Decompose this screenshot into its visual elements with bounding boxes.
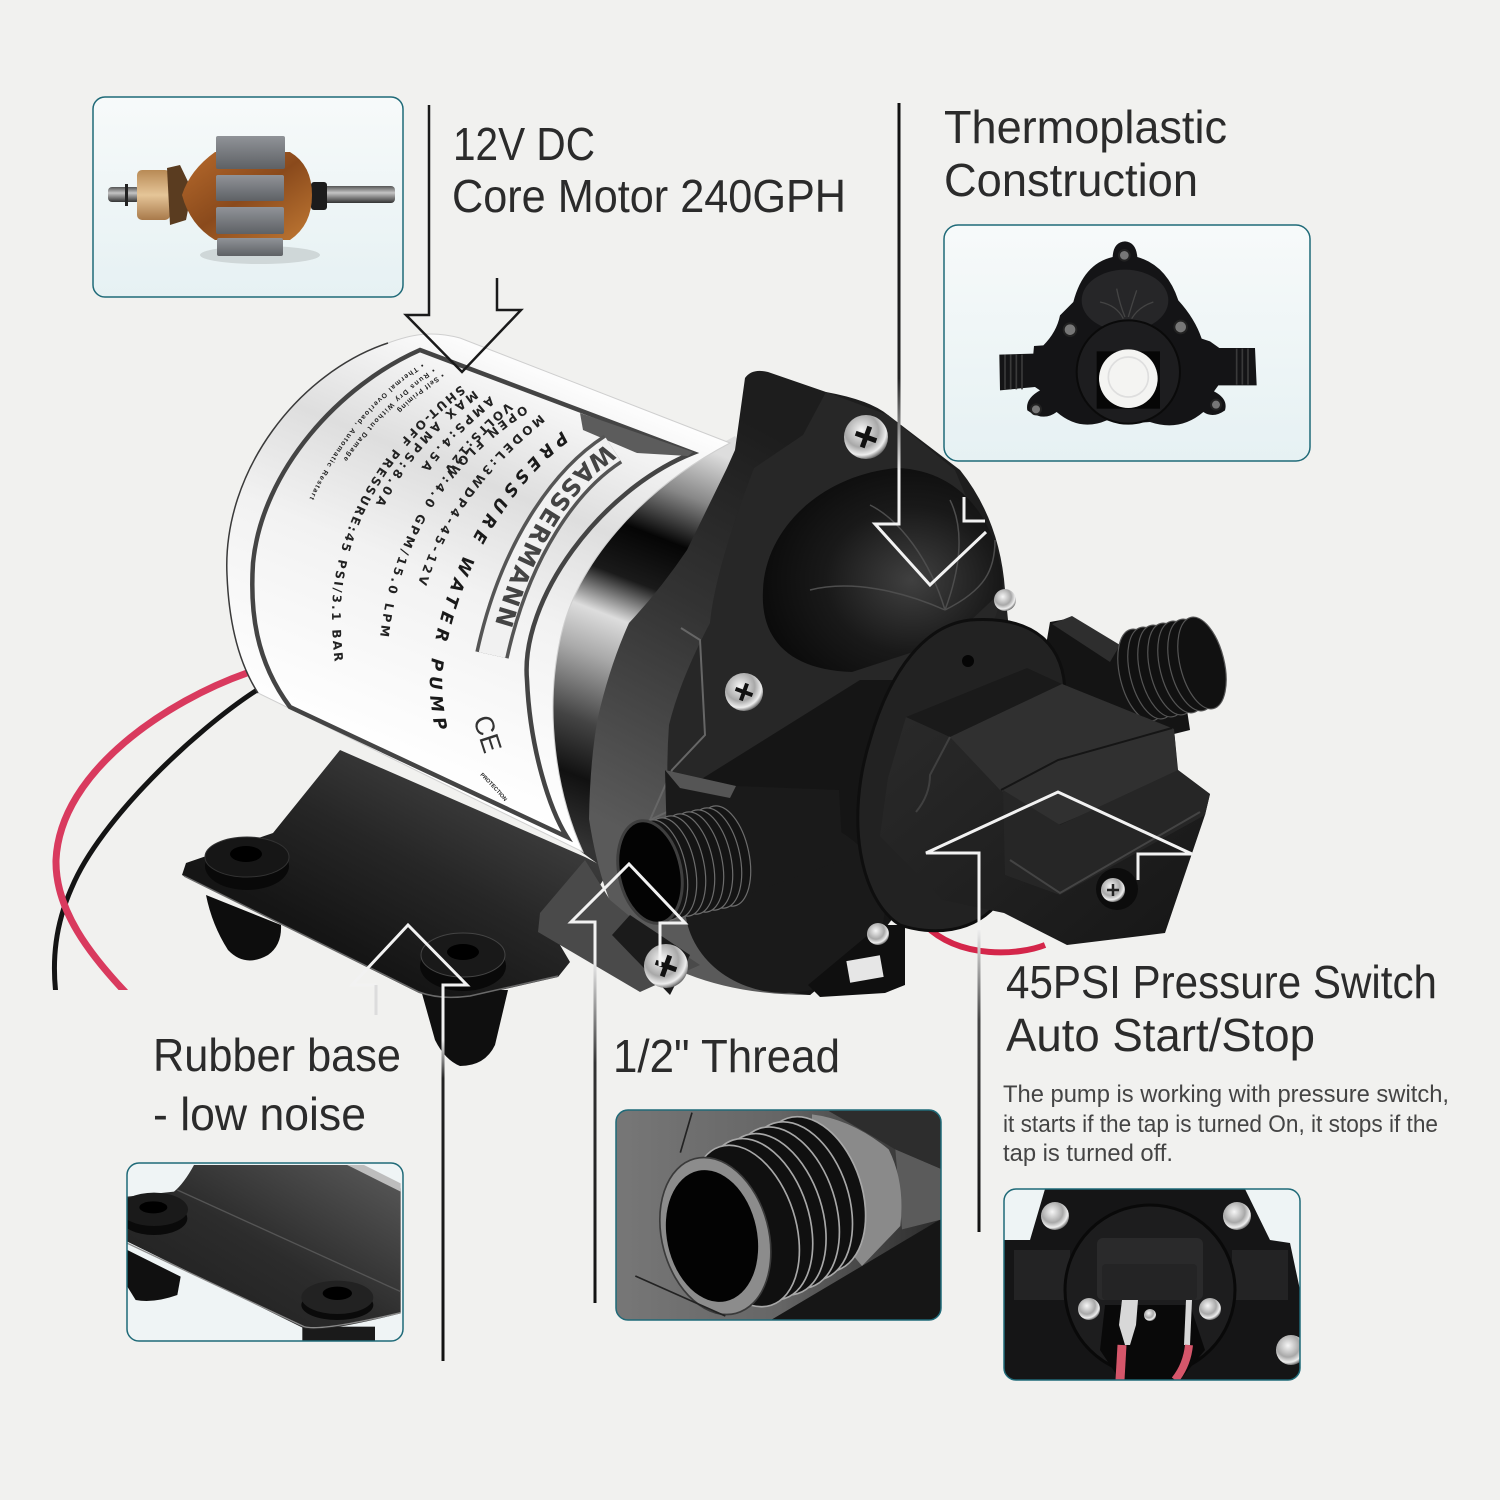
heading: rubber base: Rubber base <box>153 1029 401 1081</box>
switch cover <box>1097 1238 1203 1300</box>
flange step highlight <box>650 628 705 820</box>
copper windings <box>182 152 312 240</box>
pressure switch description <box>1003 1081 1449 1167</box>
screws top right <box>1223 1202 1251 1230</box>
pump head <box>1004 1189 1300 1380</box>
heading: motor: Core Motor 240GPH <box>452 170 846 222</box>
outlet port <box>1040 612 1235 745</box>
cover step <box>1102 1264 1197 1300</box>
tab front barrel <box>612 915 690 995</box>
grommet left <box>128 1214 188 1235</box>
switch disc <box>1065 1205 1235 1375</box>
inlet port <box>609 770 843 929</box>
power wires <box>54 673 257 995</box>
heading: thread: 1/2" Thread <box>613 1030 840 1082</box>
heading: rubber base: - low noise <box>153 1088 366 1140</box>
arrow: thermoplastic callout <box>875 103 986 585</box>
heading: motor: 12V DC <box>453 118 595 170</box>
plate <box>127 1165 401 1329</box>
volts: VOLTS:12V <box>446 404 514 474</box>
product name: PRESSURE WATER PUMP <box>430 431 568 729</box>
front foot <box>421 990 508 1066</box>
right terminal <box>1184 1300 1192 1345</box>
thermal protection mark: PROTECTION <box>480 772 508 802</box>
heading: rubber base <box>153 1029 401 1140</box>
lug holes <box>1031 250 1221 414</box>
disc pin hole <box>962 655 974 667</box>
head housing <box>999 241 1257 425</box>
feature line one: • Self Priming <box>397 374 444 412</box>
plate <box>182 750 610 998</box>
CE mark: CE <box>467 712 507 757</box>
screw mid <box>725 673 763 711</box>
model: MODEL:3WDP4-45-12V <box>419 414 545 586</box>
screw lower small <box>867 923 889 945</box>
rear flange <box>589 371 1010 995</box>
top strip <box>347 1165 401 1192</box>
red switch wire <box>925 925 1045 952</box>
panel: switch terminals <box>1004 1189 1306 1380</box>
white diaphragm <box>1099 349 1158 408</box>
can back edge <box>227 343 388 693</box>
panel: rubber base <box>120 1163 403 1343</box>
pressure switch description: it starts if the tap is turned On, it stops if the <box>1003 1111 1438 1138</box>
right collar <box>311 182 327 210</box>
open flow: OPEN FLOW:4.0 GPM/15.0 LPM <box>380 406 527 636</box>
inlet opening <box>609 815 691 929</box>
product label border <box>252 350 693 837</box>
housing seam <box>635 1113 725 1316</box>
amps: AMPS:4.5A <box>421 396 493 470</box>
arrow: rubber base callout <box>352 925 467 1361</box>
label text <box>310 364 622 802</box>
heading: pressure switch: Auto Start/Stop <box>1006 1009 1315 1061</box>
top right shade <box>829 1111 942 1169</box>
inlet thread ridges <box>626 801 759 925</box>
screw mid left <box>1078 1298 1100 1320</box>
port collar <box>812 1114 901 1266</box>
rear foot <box>127 1250 181 1301</box>
bracket window <box>846 955 884 983</box>
pipe body <box>895 1149 942 1229</box>
red wire right <box>1175 1345 1189 1380</box>
fold highlight <box>177 1190 401 1292</box>
panel: motor rotor <box>93 97 403 297</box>
brand logo band <box>492 449 613 655</box>
rotor shadow <box>200 246 320 264</box>
left shaft <box>108 187 140 202</box>
arrow: motor callout <box>406 105 521 372</box>
cover screw <box>1096 868 1138 910</box>
centre ring <box>1077 320 1180 424</box>
dome ribs <box>810 500 995 610</box>
port opening <box>666 1170 758 1302</box>
screw lower right <box>1276 1335 1306 1365</box>
centre square <box>1097 351 1160 409</box>
heading: pressure switch <box>1006 956 1437 1061</box>
panel: thermoplastic head <box>944 225 1310 461</box>
shut-off pressure: SHUT-OFF PRESSURE:45 PSI/3.1 BAR <box>332 386 465 662</box>
motor can <box>227 334 730 852</box>
mounting base plate <box>182 750 610 1066</box>
dome head <box>763 468 1003 672</box>
diaphragm ring <box>1108 357 1148 397</box>
lower dome <box>685 817 885 993</box>
plate edge <box>127 1243 401 1328</box>
heading: thermoplastic: Construction <box>944 154 1198 206</box>
rear foot <box>206 895 281 960</box>
rear grommet <box>205 837 289 890</box>
switch mounting disc <box>858 620 1065 931</box>
heading: motor <box>452 118 846 222</box>
port mouth <box>659 1156 772 1316</box>
pressure switch cover <box>880 668 1210 945</box>
screw top <box>844 415 888 459</box>
screw bottom <box>644 944 688 988</box>
left collar <box>125 184 128 206</box>
brand logo inner <box>492 449 613 655</box>
dome <box>1082 270 1168 331</box>
pressure switch description: tap is turned off. <box>1003 1140 1173 1167</box>
heading: pressure switch: 45PSI Pressure Switch <box>1006 956 1437 1008</box>
side ports <box>1014 1250 1288 1300</box>
outlet thread ridges <box>1109 612 1235 726</box>
brand name: WASSERMANN <box>496 446 617 627</box>
commutator leads <box>167 165 188 225</box>
port threads <box>1005 349 1248 389</box>
left terminal <box>1119 1300 1138 1345</box>
heading: thermoplastic: Thermoplastic <box>944 101 1227 153</box>
red wire left <box>1120 1345 1122 1380</box>
grommet right <box>301 1302 374 1320</box>
feature line two: • Runs Dry Without Damage <box>344 370 434 461</box>
mount bracket <box>808 925 905 997</box>
screw right small <box>994 589 1016 611</box>
feature line three: • Thermal Overload, Automatic Restart <box>310 364 424 500</box>
right shaft <box>320 186 395 203</box>
pump product illustration <box>52 334 1227 1066</box>
screws top left <box>1041 1202 1069 1230</box>
terminal well <box>1100 1305 1205 1380</box>
laminated core bars <box>216 136 285 256</box>
screw mid right <box>1199 1298 1221 1320</box>
dark lower background <box>772 1219 940 1324</box>
pressure switch description: The pump is working with pressure switch, <box>1003 1081 1449 1108</box>
arrow: thread callout <box>571 864 685 1303</box>
heading: thermoplastic <box>944 101 1227 206</box>
motor metal band <box>510 436 790 880</box>
panel: thread close-up <box>616 1103 942 1327</box>
label corner band <box>580 413 693 456</box>
plate edge <box>184 876 558 997</box>
commutator <box>137 170 170 220</box>
lower head body <box>700 680 960 995</box>
lower left mounting tab <box>538 860 700 992</box>
bottom foot <box>302 1326 375 1340</box>
screw center <box>1144 1309 1156 1321</box>
middle housing layer <box>667 392 1005 995</box>
max amps: MAX AMPS:8.0A <box>376 390 478 505</box>
dome ribs <box>1100 289 1153 319</box>
thread rings <box>704 1116 866 1308</box>
arrow: pressure switch callout <box>926 792 1192 1232</box>
front grommet <box>420 933 506 991</box>
